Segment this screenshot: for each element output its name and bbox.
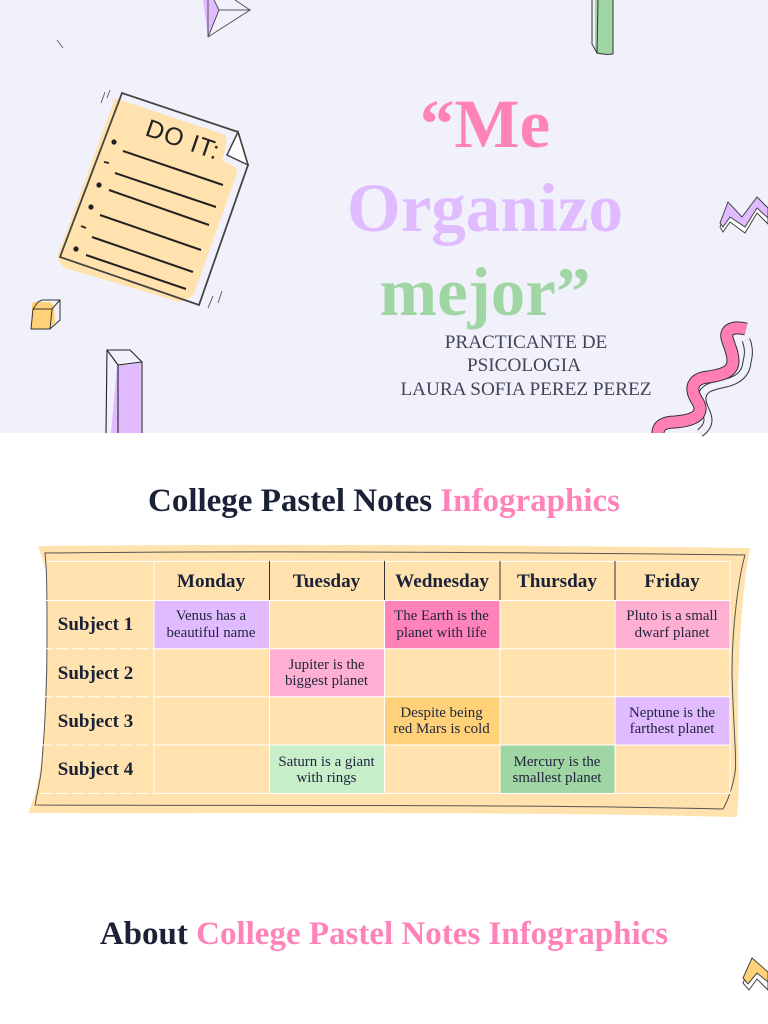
cell text: beautiful name	[167, 625, 256, 641]
table headers: Friday	[644, 571, 700, 592]
cell text: Saturn is a giant	[278, 754, 376, 770]
table headers: Wednesday	[395, 571, 489, 592]
cell text: with rings	[297, 770, 357, 786]
icon: purple column	[106, 350, 142, 433]
cell text	[167, 608, 718, 786]
cell text: Despite being	[400, 705, 483, 721]
cell text: smallest planet	[513, 770, 602, 786]
icon: do-it note	[58, 90, 248, 308]
cell text: dwarf planet	[635, 625, 710, 641]
highlighted cells	[154, 600, 730, 793]
icon: do-it note: DO IT:	[142, 114, 224, 166]
icon: yellow zigzag	[743, 958, 768, 990]
row labels: Subject 3	[58, 711, 133, 732]
cell text: planet with life	[396, 625, 487, 641]
table headers: Tuesday	[293, 571, 361, 592]
cell text: Mercury is the	[514, 754, 601, 770]
title: mejor”	[380, 254, 590, 330]
row labels	[58, 614, 134, 780]
icon: small tick marks	[57, 40, 63, 48]
subtitle: author: PSICOLOGIA	[467, 355, 581, 376]
subtitle: author: LAURA SOFIA PEREZ PEREZ	[400, 379, 652, 400]
cell text: farthest planet	[630, 721, 715, 737]
cell text: Jupiter is the	[288, 657, 365, 673]
icon: pink squiggle	[658, 328, 748, 433]
cell text: biggest planet	[285, 673, 369, 689]
subtitle: author: PRACTICANTE DE	[445, 332, 607, 353]
icon: purple zigzag	[720, 197, 768, 233]
cell text: red Mars is cold	[393, 721, 490, 737]
subtitle: author	[400, 332, 652, 400]
table headers: Monday	[177, 571, 246, 592]
row labels: Subject 2	[58, 663, 133, 684]
row labels: Subject 4	[58, 759, 134, 780]
icon: green block top	[592, 0, 613, 54]
table headers	[177, 571, 700, 592]
title: “Me	[420, 86, 550, 162]
heading: about: About College Pastel Notes Infographics	[100, 916, 668, 952]
title	[347, 86, 623, 330]
paper sketch outline	[35, 552, 745, 809]
cell text: Venus has a	[176, 608, 247, 624]
icon: yellow cube	[31, 300, 60, 329]
panel: schedule table	[28, 545, 750, 817]
table headers: Thursday	[517, 571, 597, 592]
cell text: The Earth is the	[394, 608, 489, 624]
cell text: Pluto is a small	[626, 608, 718, 624]
cell text: Neptune is the	[629, 705, 715, 721]
icon: purple pyramid top	[203, 0, 250, 38]
title: Organizo	[347, 170, 623, 246]
paper background	[28, 545, 750, 817]
row labels: Subject 1	[58, 614, 133, 635]
heading: college pastel notes: College Pastel Notes Infographics	[148, 483, 620, 519]
